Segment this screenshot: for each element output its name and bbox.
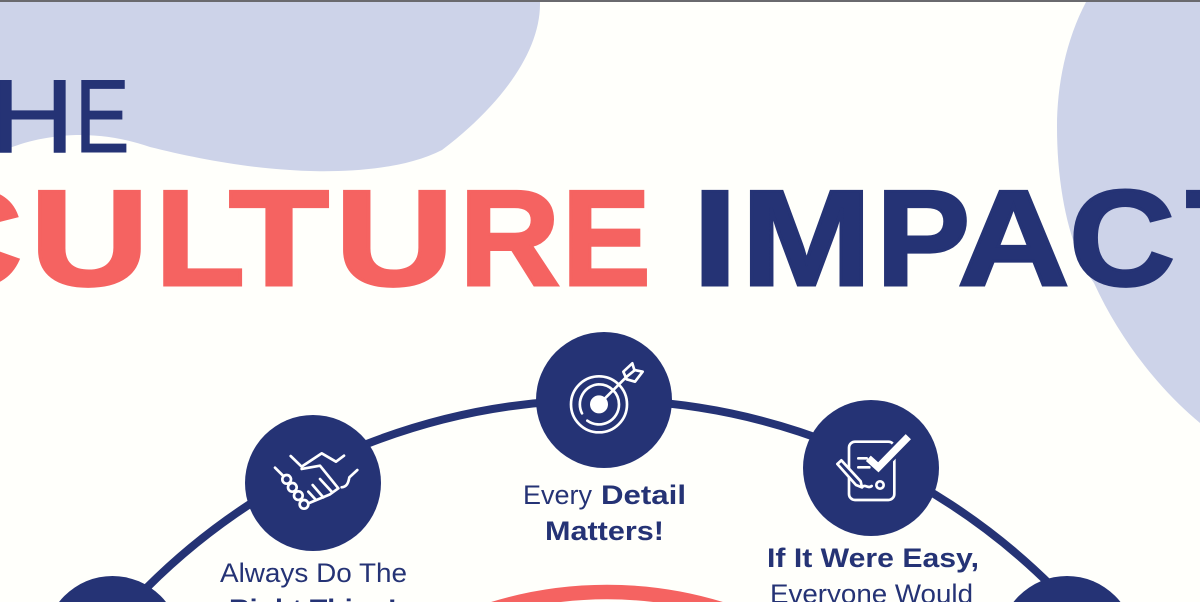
label: every detail matters: Every [523, 480, 592, 510]
title word: CULTURE: T [229, 162, 329, 314]
label: every detail matters: Matters! [545, 516, 664, 546]
icon: handshake [275, 453, 357, 509]
background blob: top left [0, 2, 540, 171]
node: if it were easy [767, 400, 979, 602]
title word: THE: E [75, 59, 130, 175]
title word: THE [0, 59, 130, 175]
label: always do the right thing: Always Do The [220, 558, 407, 588]
node: always do the right thing [220, 415, 407, 602]
label: every detail matters: Detail [601, 480, 686, 510]
title [0, 59, 1200, 314]
title word: CULTURE: U [335, 162, 454, 314]
title word: IMPACT: M [741, 162, 872, 314]
title word: IMPACT: C [1069, 162, 1175, 314]
title word: CULTURE [0, 162, 651, 314]
background blob: right [1057, 2, 1200, 423]
node: bottom left circle [44, 576, 180, 602]
label: if it were easy: If It Were Easy, [767, 543, 979, 573]
title word: CULTURE: L [155, 162, 245, 314]
title word: CULTURE: E [562, 162, 651, 314]
node: bottom right circle [999, 576, 1135, 602]
title word: CULTURE: R [459, 162, 560, 314]
label: if it were easy [767, 543, 979, 602]
title word: IMPACT [692, 162, 1200, 314]
title word: CULTURE: U [30, 162, 149, 314]
title word: IMPACT: A [958, 162, 1070, 314]
title word: IMPACT: P [876, 162, 970, 314]
red centre ring [217, 592, 997, 602]
connecting arc [0, 400, 1200, 602]
label: always do the right thing [220, 558, 407, 602]
top edge line [0, 0, 1200, 2]
title word: IMPACT: I [692, 162, 738, 314]
label: every detail matters [523, 480, 686, 546]
node: every detail matters [523, 332, 686, 546]
icon: target with arrow [571, 363, 643, 432]
icon: signed checklist [837, 437, 908, 500]
